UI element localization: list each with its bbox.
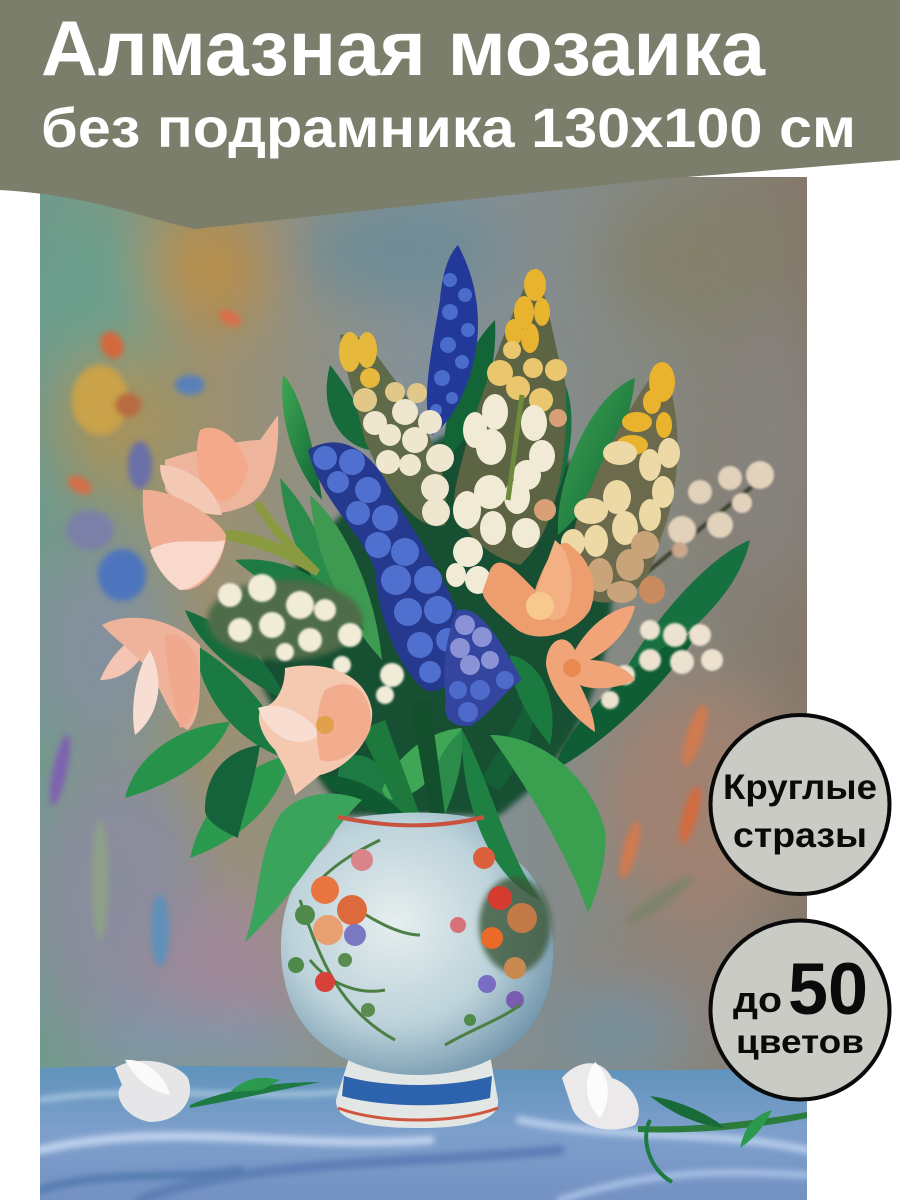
- white small flower cluster right bottom: [601, 620, 723, 709]
- painted background wall: [30, 177, 820, 1080]
- vase foot: [336, 1055, 498, 1128]
- leaves and stems: [125, 320, 750, 942]
- badge: round rhinestones: Круглые: [723, 768, 877, 807]
- yellow and white spike right: [561, 362, 680, 604]
- vase floral right: [445, 847, 551, 1045]
- badge: up to 50 colours: [710, 920, 890, 1100]
- table with blue drapery: [40, 1066, 807, 1200]
- yellow and white spike left: [339, 332, 454, 526]
- header banner: [0, 0, 900, 229]
- purple hyacinth small: [444, 610, 522, 726]
- orange tulip upper: [483, 540, 594, 636]
- badge: round rhinestones: [710, 715, 890, 894]
- yellow and white spike centre: [446, 268, 567, 594]
- front leaves over the vase: [245, 730, 605, 942]
- badge: up to 50 colours: цветов: [736, 1023, 864, 1060]
- tulip left: [100, 618, 200, 735]
- fallen white tulip left: [115, 1060, 320, 1122]
- blue hyacinth top: [427, 245, 478, 435]
- title: line 2: без подрамника 130х100 см: [41, 96, 856, 159]
- vase rim: [338, 817, 484, 825]
- dark foliage mass behind the bouquet: [260, 419, 612, 815]
- orange tulip lower: [546, 606, 635, 732]
- title: line 1: Алмазная мозаика: [41, 4, 766, 92]
- vase floral left: [288, 840, 420, 1040]
- painting: flower bouquet in a vase: [30, 177, 820, 1200]
- badge: round rhinestones: стразы: [733, 816, 867, 855]
- badge: up to 50 colours: до: [733, 979, 782, 1020]
- white small flower cluster right top: [640, 461, 774, 578]
- white small flower cluster left: [207, 574, 404, 704]
- fallen white tulip right: [562, 1062, 807, 1182]
- vase body: [281, 812, 553, 1075]
- badge: up to 50 colours: 50: [788, 949, 868, 1030]
- porcelain vase: [245, 730, 605, 1128]
- tulip top left: [143, 415, 278, 590]
- tulip centre left: [258, 665, 372, 795]
- blue hyacinth large: [308, 442, 465, 691]
